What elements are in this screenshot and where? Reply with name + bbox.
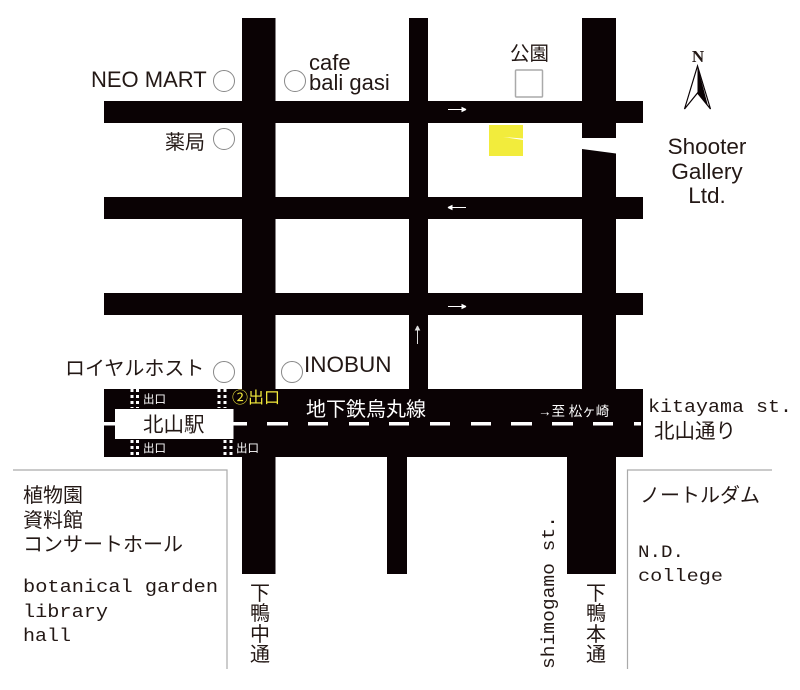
label: cafe: cafe xyxy=(309,50,351,75)
exit 2: highlighted: ②出口 xyxy=(232,389,280,407)
gap in road for gallery pointer xyxy=(582,138,616,154)
label: Kitayama-dori: 北山通り xyxy=(654,420,736,443)
label: Shimogamo-naka-dori: 鴨 xyxy=(250,602,270,625)
destination label: →至 松ヶ崎 xyxy=(538,404,609,419)
destination marker: yellow building xyxy=(489,125,523,156)
label: Shimogamo-naka-dori: 中 xyxy=(250,623,270,646)
label: shimogamo st.: shimogamo st. xyxy=(540,516,560,669)
icon: circle pharmacy xyxy=(214,128,234,150)
exit: bottom left xyxy=(132,440,166,457)
label: Shooter Gallery xyxy=(668,134,747,208)
icon: north arrow: N xyxy=(692,47,705,66)
icon: circle Inobun xyxy=(282,362,302,382)
label: Shooter Gallery: Gallery xyxy=(671,159,743,184)
icon: north arrow xyxy=(684,47,710,109)
icon: circle Royal Host xyxy=(214,362,234,382)
exit: top left: 出口 xyxy=(143,393,166,406)
panel: Notre Dame xyxy=(628,470,772,669)
panel: Notre Dame: college xyxy=(638,567,723,587)
icon: circle NEO MART xyxy=(214,70,234,92)
arrow: east top road xyxy=(448,108,466,112)
label: bali gasi: bali gasi xyxy=(309,70,390,95)
label: Shimogamo-naka-dori: 通 xyxy=(250,643,270,666)
label: Shimogamo-hon-dori: 鴨 xyxy=(586,602,606,625)
label: Shimogamo-hon-dori: 通 xyxy=(586,643,606,666)
icon: park square xyxy=(516,70,542,97)
panel: botanical garden: 植物園 xyxy=(23,484,83,507)
label: Royal Host: ロイヤルホスト xyxy=(65,358,204,380)
panel: botanical garden xyxy=(13,470,227,669)
panel: botanical garden: 資料館 xyxy=(23,509,83,532)
panel: Notre Dame: N.D. xyxy=(638,543,684,563)
label: Shooter Gallery: Shooter xyxy=(668,134,747,159)
exit: bottom second xyxy=(225,440,259,457)
arrow: east lower road xyxy=(448,304,466,308)
subway line label: 地下鉄烏丸線 xyxy=(306,398,426,421)
label: Shimogamo-naka-dori xyxy=(250,583,270,666)
label: Shimogamo-hon-dori: 下 xyxy=(586,583,606,605)
panel: botanical garden: コンサートホール xyxy=(23,534,183,556)
label: Shimogamo-hon-dori xyxy=(586,583,606,666)
station box: Kitayama: 北山駅 xyxy=(143,414,204,436)
panel: botanical garden: hall xyxy=(23,627,71,647)
subway dashed line xyxy=(104,422,641,426)
arrow: north xyxy=(416,326,420,344)
arrow: west middle road xyxy=(448,206,466,210)
label: NEO MART: NEO MART xyxy=(91,67,207,92)
panel: botanical garden: library xyxy=(23,603,108,623)
icon: circle cafe xyxy=(284,70,306,92)
exit: bottom left: 出口 xyxy=(143,442,166,455)
label: kitayama st.: kitayama st. xyxy=(648,398,792,418)
label: pharmacy: 薬局 xyxy=(165,131,205,154)
label: park: 公園 xyxy=(510,43,549,65)
label: INOBUN: INOBUN xyxy=(304,352,392,377)
station box: Kitayama xyxy=(115,409,234,439)
panel: Notre Dame: ノートルダム xyxy=(640,484,760,507)
road network xyxy=(104,18,643,574)
label: Shimogamo-hon-dori: 本 xyxy=(586,623,606,646)
label: Shimogamo-naka-dori: 下 xyxy=(250,583,270,605)
panel: botanical garden: botanical garden xyxy=(23,578,218,598)
exit: bottom second: 出口 xyxy=(236,442,259,455)
label: Shooter Gallery: Ltd. xyxy=(688,183,726,208)
exit: top left xyxy=(132,389,166,408)
